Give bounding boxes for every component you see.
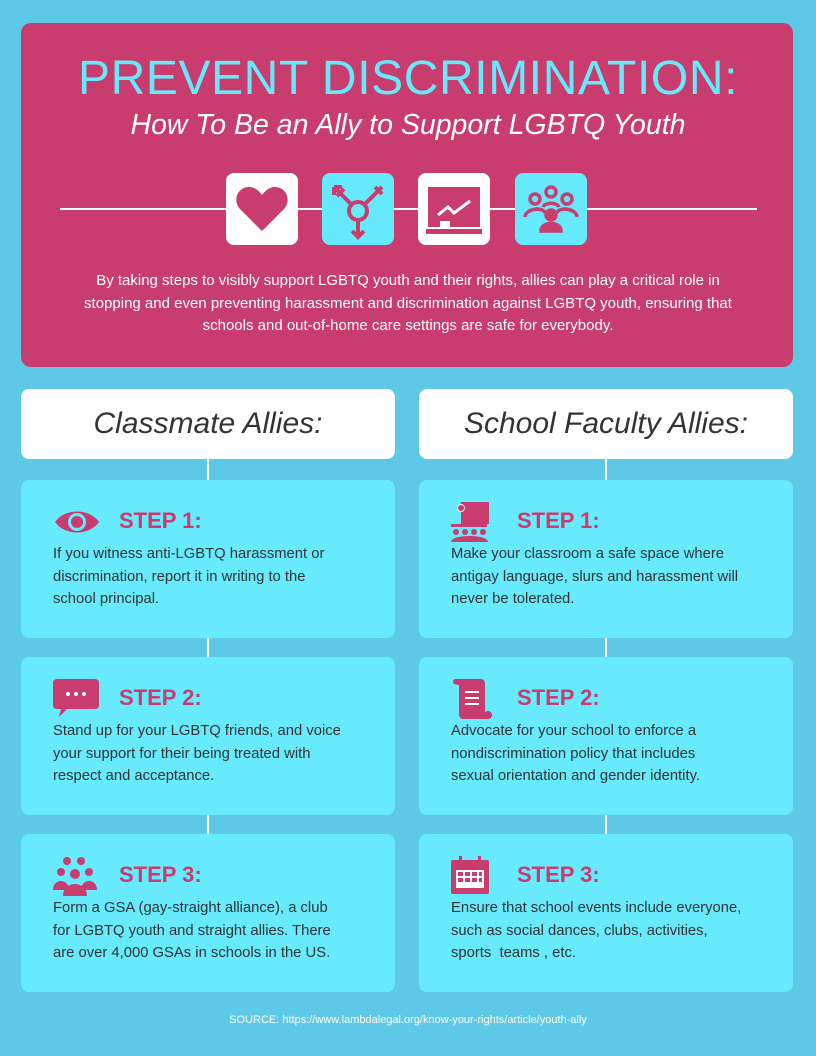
card: faculty step 3: Ensure that school events include everyone,	[451, 900, 741, 916]
card: faculty step 2: nondiscrimination policy that includes	[451, 746, 695, 762]
card: classmate step 1: STEP 1:	[119, 508, 202, 533]
icon: scroll document	[453, 679, 492, 719]
column heading: school faculty allies	[419, 389, 793, 459]
intro paragraph: By taking steps to visibly support LGBTQ youth and their rights, allies can play a critical role in	[96, 272, 720, 289]
column heading: school faculty allies: School Faculty Allies:	[464, 407, 748, 440]
card: classmate step 2: respect and acceptance.	[53, 768, 214, 784]
card: faculty step 2: STEP 2:	[517, 685, 600, 710]
card: faculty step 3: STEP 3:	[517, 862, 600, 887]
card: faculty step 2	[419, 657, 793, 815]
card: faculty step 2: Advocate for your school to enforce a	[451, 723, 696, 739]
intro paragraph	[84, 272, 732, 334]
card: classmate step 3: Form a GSA (gay-straight alliance), a club	[53, 900, 328, 916]
subtitle: How To Be an Ally to Support LGBTQ Youth	[130, 109, 686, 141]
intro paragraph: stopping and even preventing harassment and discrimination against LGBTQ youth, ensuring that	[84, 294, 732, 312]
card: classmate step 1: school principal.	[53, 591, 159, 607]
icon: eye	[55, 512, 99, 532]
card: classmate step 3	[21, 834, 395, 992]
icon: group of people	[515, 173, 587, 245]
column heading: classmate allies	[21, 389, 395, 459]
icon: teacher classroom	[451, 502, 489, 542]
card: classmate step 3: are over 4,000 GSAs in schools in the US.	[53, 945, 330, 961]
card: faculty step 1: Make your classroom a safe space where	[451, 546, 724, 562]
icon: transgender symbol	[322, 173, 394, 245]
header panel	[21, 23, 793, 367]
card: classmate step 2	[21, 657, 395, 815]
icon: calendar	[451, 856, 489, 894]
card: faculty step 1: antigay language, slurs and harassment will	[451, 568, 738, 584]
card: classmate step 1	[21, 480, 395, 638]
source footer: SOURCE: https://www.lambdalegal.org/know-your-rights/article/youth-ally	[229, 1014, 587, 1026]
card: classmate step 2: Stand up for your LGBTQ friends, and voice	[53, 723, 341, 739]
card: classmate step 3: for LGBTQ youth and straight allies. There	[53, 922, 331, 938]
card: faculty step 3	[419, 834, 793, 992]
card: classmate step 1: If you witness anti-LGBTQ harassment or	[53, 546, 324, 562]
icon row line	[60, 208, 757, 210]
icon: speech bubble	[53, 679, 99, 717]
card: classmate step 2: STEP 2:	[119, 685, 202, 710]
card: faculty step 3: such as social dances, clubs, activities,	[451, 922, 708, 938]
icon: people	[53, 857, 97, 896]
card: faculty step 1	[419, 480, 793, 638]
column heading: classmate allies: Classmate Allies:	[94, 407, 322, 440]
card: faculty step 1: never be tolerated.	[451, 591, 574, 607]
card: classmate step 3: STEP 3:	[119, 862, 202, 887]
icon: heart	[226, 173, 298, 245]
card: faculty step 1: STEP 1:	[517, 508, 600, 533]
card: faculty step 3: sports teams , etc.	[451, 945, 576, 961]
card: faculty step 2: sexual orientation and gender identity.	[451, 768, 700, 784]
icon: chalkboard chart	[418, 173, 490, 245]
card: classmate step 1: discrimination, report it in writing to the	[53, 568, 305, 584]
intro paragraph: schools and out-of-home care settings are safe for everybody.	[203, 317, 613, 334]
title: PREVENT DISCRIMINATION:	[78, 52, 738, 105]
card: classmate step 2: your support for their being treated with	[53, 746, 310, 762]
